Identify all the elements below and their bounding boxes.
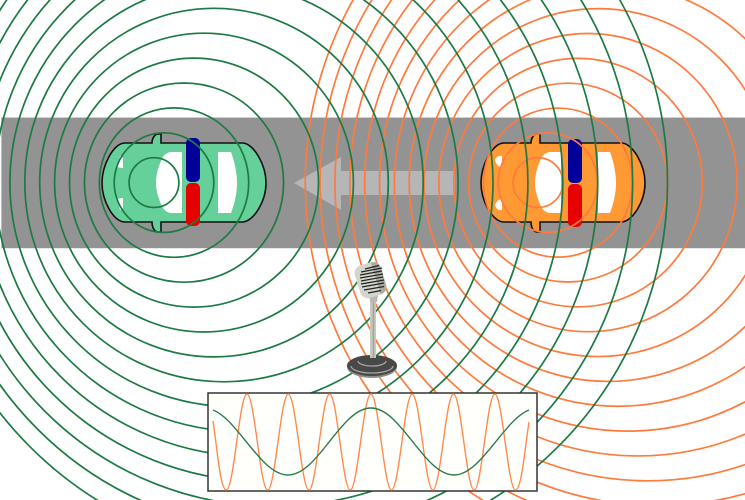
- road: [1, 117, 745, 248]
- icon: microphone: [347, 260, 397, 378]
- orange car: [481, 134, 645, 232]
- orange wavefronts: [305, 0, 745, 500]
- orange waveform: [213, 394, 529, 490]
- green car: [102, 134, 266, 232]
- green waveform: [213, 408, 529, 475]
- waveform panel: [208, 393, 537, 491]
- arrow: direction of travel: [294, 157, 455, 210]
